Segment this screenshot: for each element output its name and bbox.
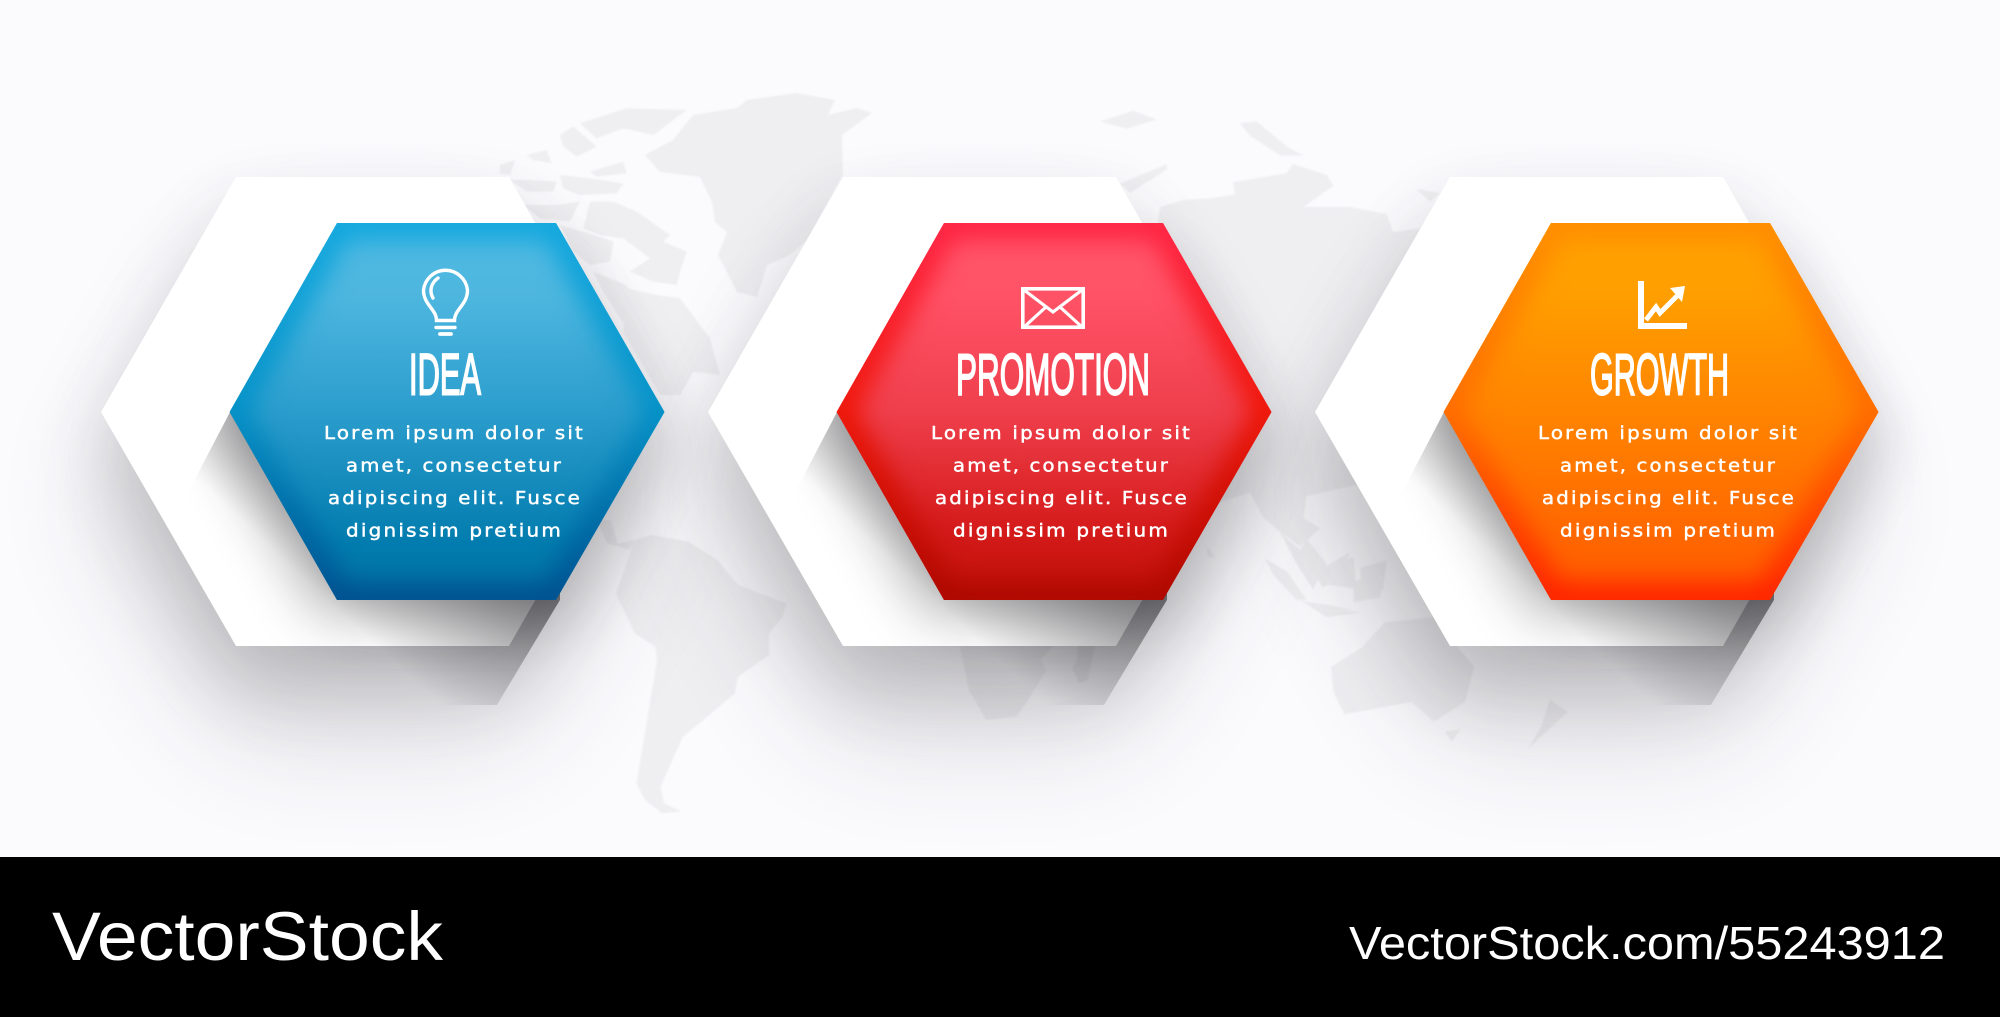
orange hexagon [1444, 223, 1878, 600]
soft shadows under white hexagons [101, 217, 1894, 731]
text block: growth: adipiscing elit. Fusce [1542, 488, 1796, 509]
heading: growth: GROWTH [1590, 342, 1729, 408]
text block: promotion: Lorem ipsum dolor sit [931, 423, 1192, 444]
icon: light bulb [424, 270, 468, 334]
panel: idea [101, 177, 664, 705]
footer logo text: VectorStock [52, 898, 444, 975]
heading: promotion: PROMOTION [956, 342, 1150, 408]
icon: envelope [1023, 289, 1083, 327]
icon: growth chart [1638, 281, 1687, 329]
text block: growth: amet, consectetur [1560, 456, 1777, 476]
white backing hexagon: promotion [708, 177, 1250, 646]
panel: growth [1315, 177, 1878, 705]
cast shadow: promotion [805, 412, 1167, 705]
text block: promotion: adipiscing elit. Fusce [935, 488, 1189, 509]
panel: promotion [708, 177, 1272, 705]
cast shadow: growth [1412, 412, 1774, 705]
world map [500, 93, 1568, 813]
text block: idea: dignissim pretium [346, 520, 563, 542]
white backing hexagon: idea [101, 177, 643, 646]
text block: promotion: amet, consectetur [953, 456, 1170, 476]
text block: growth: Lorem ipsum dolor sit [1538, 423, 1799, 444]
text block: idea: amet, consectetur [346, 456, 563, 476]
footer band [0, 857, 2000, 1017]
heading: idea: IDEA [409, 342, 481, 408]
text block: idea: Lorem ipsum dolor sit [324, 423, 585, 444]
text block: growth: dignissim pretium [1560, 520, 1777, 542]
text block: promotion [931, 423, 1192, 542]
footer url text: VectorStock.com/55243912 [1349, 917, 1945, 969]
cast shadow: idea [198, 412, 560, 705]
text block: idea [324, 423, 585, 542]
text block: promotion: dignissim pretium [953, 520, 1170, 542]
red hexagon [837, 223, 1272, 600]
blue hexagon [230, 223, 664, 600]
text block: growth [1538, 423, 1799, 542]
white backing hexagon: growth [1315, 177, 1857, 646]
text block: idea: adipiscing elit. Fusce [328, 488, 582, 509]
